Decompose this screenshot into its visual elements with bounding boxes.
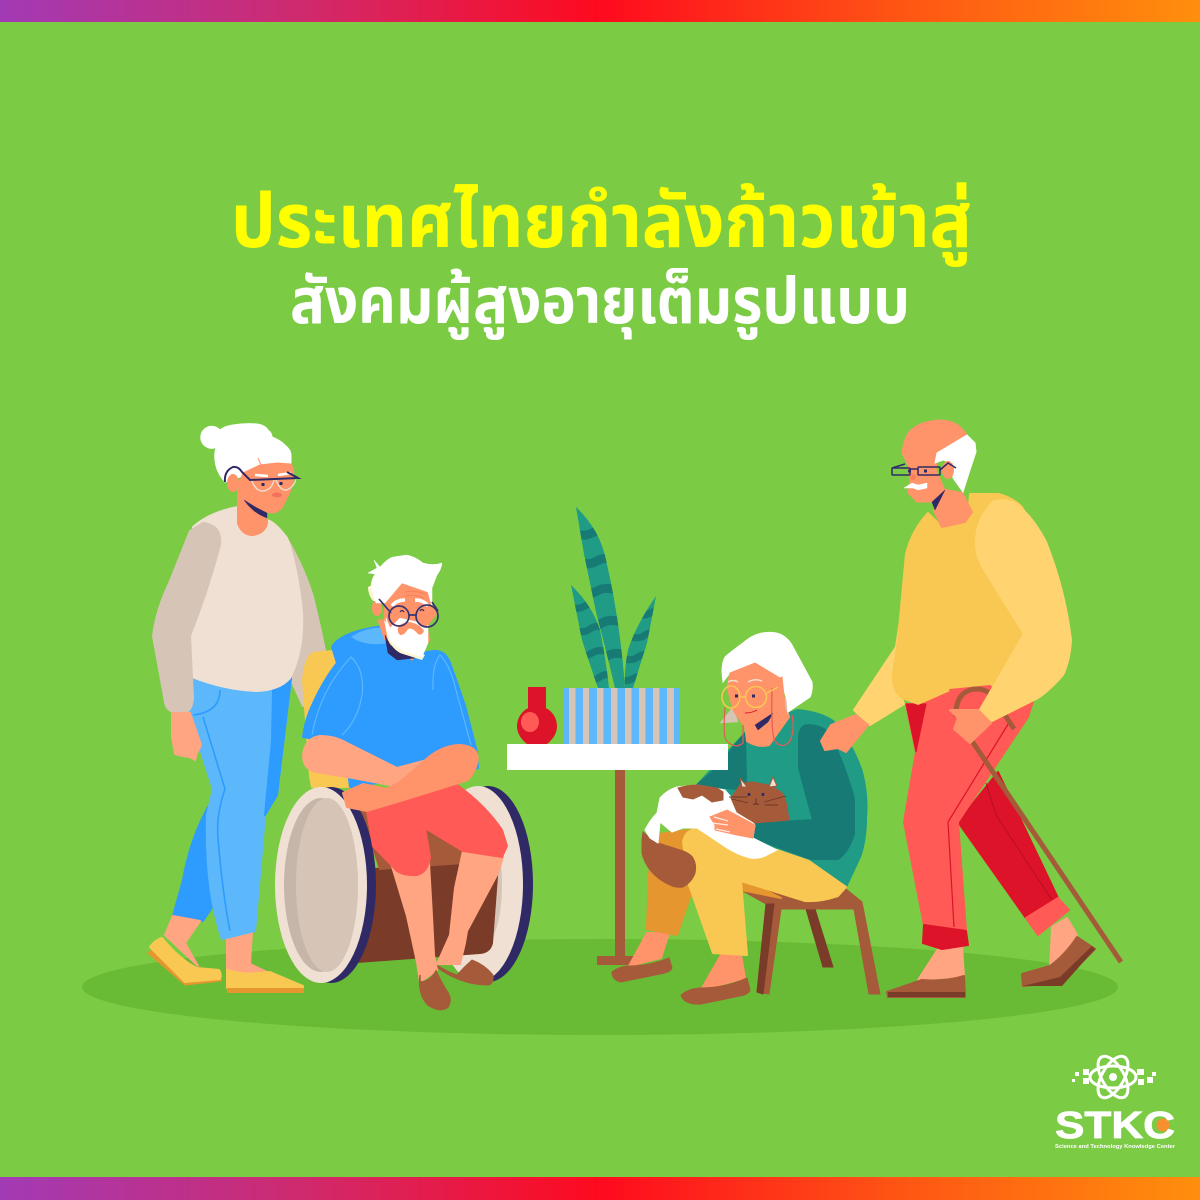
logo: STKC [1055,1052,1176,1150]
table top [507,744,728,770]
near wheel inner shade [284,798,358,972]
near arm [153,523,220,714]
orbit 1 [1090,1066,1136,1088]
bridge and arm [892,463,956,470]
beard [386,618,428,657]
neck shadow [244,500,267,518]
left lens [892,468,910,475]
under thigh [741,878,781,898]
stool front leg shade [757,904,774,994]
front calf [227,931,267,972]
neck [378,620,430,660]
smile [745,710,757,713]
neck [238,490,267,535]
moustache [904,483,927,490]
hood highlight [352,628,385,644]
figure: standing woman with bun [148,424,325,993]
fingers [712,817,730,832]
front shoe upper [227,970,303,988]
hair shade behind ear [783,698,789,715]
face [384,583,437,645]
back leg seam [986,783,1052,900]
far wheel rim [443,786,533,982]
stool back leg [806,909,833,967]
trousers [188,676,291,939]
near leg [391,863,437,982]
sleeve seams [312,655,471,745]
far arm [288,540,325,706]
figure: standing man with cane [821,420,1121,997]
ear [942,461,954,479]
pixel squares [1072,1069,1156,1085]
eyebrows [728,680,762,682]
right leaf [625,596,656,688]
back foot [629,933,669,966]
bottom gradient bar [0,1177,1200,1200]
upper arm [303,736,445,787]
neck shadow [755,713,773,730]
near wheel rim [286,787,376,983]
hair [368,555,442,607]
hand [172,713,201,760]
seat cushion [350,781,465,869]
near hand [950,710,991,743]
right lens [746,686,766,708]
eyes [400,610,424,612]
glasses [379,599,438,627]
trouser seam [203,717,230,931]
nucleus [1109,1073,1117,1081]
nose and moustache [398,622,424,635]
torso [893,494,1050,704]
striped pot [564,688,679,744]
table leg [615,770,625,957]
tagline: Science and Technology Knowledge Center [1055,1144,1176,1150]
hair cream edge [368,585,378,601]
mouth [272,492,282,498]
cat nose and mouth [753,798,759,804]
face [727,663,785,725]
cat whiskers [729,796,786,805]
beard shadow [385,635,415,660]
front shoe [681,978,750,1004]
hand on shoulder [821,715,868,752]
trouser pocket [193,690,220,715]
right leaf stripes [624,608,654,684]
hoodie [303,626,478,787]
table with vase and plant [517,507,679,965]
figure: seated woman with cat [612,632,880,1004]
vase highlight [521,712,539,732]
stool [741,885,880,994]
eyes [263,482,281,486]
hair parting [258,458,261,465]
near slipper [420,971,450,1010]
near arm [976,500,1071,721]
hand on cat [710,810,755,838]
eyebrows [392,600,428,606]
sleeve near table [697,733,746,789]
front foot [701,955,745,990]
title line 1: ประเทศไทยกำลังก้าวเข้าสู่ [231,179,972,267]
trouser shade [906,704,926,752]
title line 2: สังคมผู้สูงอายุเต็มรูปแบบ [290,265,910,340]
left leaf [571,585,609,688]
back shoe sole [148,950,221,985]
back calf [165,916,200,966]
back leg skin [1050,918,1077,970]
far wheel hub [468,824,502,944]
neck [934,490,972,527]
front cuff [923,925,968,949]
shorts [367,785,507,875]
ground shadow [82,939,1118,1035]
glasses [225,467,298,491]
hair shade [720,707,738,723]
trouser seam [948,721,1010,927]
ear [372,600,382,616]
neck [745,698,789,746]
cat body [642,777,789,887]
near wheel inner [296,798,358,972]
plant [571,507,656,688]
ear [227,474,239,492]
pot base [564,688,679,744]
torso front under arm [950,686,1000,712]
cat tail patch [642,832,696,887]
back shoe [1022,937,1095,986]
front leg skin [918,947,964,980]
trousers [904,686,1034,931]
cat back patch [678,785,723,802]
cat left ear [740,778,747,787]
back leg trousers [647,830,693,935]
vase neck [528,687,546,713]
eyebrows [255,473,291,476]
seat base [357,863,498,962]
front shoe sole [227,988,304,993]
title [231,179,972,340]
pot stripes [569,688,674,744]
glasses chain [724,688,793,746]
sweater [697,710,866,887]
lower arm [343,745,478,811]
glasses [892,463,956,475]
back leg [173,807,220,921]
left leaf stripes [574,602,608,683]
left lens [389,606,409,626]
cat eyes [749,793,763,796]
top gradient bar [0,0,1200,22]
hair [201,424,291,482]
neck shadow [932,490,945,510]
table foot [597,956,639,965]
hair [722,632,812,712]
orbit 2 [1092,1052,1134,1102]
beard cream edge [384,620,425,660]
back shoe sole [1023,946,1095,986]
sweater arm [753,725,854,859]
far leg [437,851,503,964]
frame [225,467,298,482]
far slipper [435,960,493,985]
chair back [303,651,350,787]
torso [190,507,302,691]
front shoe sole [888,992,965,997]
atom emblem [1090,1052,1136,1102]
back cuff [1026,898,1069,935]
back shoe [612,958,672,982]
arm [740,687,778,697]
front leg trousers [683,828,846,955]
orbit 3 [1092,1052,1134,1102]
face [902,420,967,502]
back shoe upper [150,938,221,982]
hair [935,435,976,492]
nose [910,474,916,480]
centre leaf stripes [580,528,622,660]
glasses [722,686,778,708]
cat right ear [769,777,777,787]
lenses [252,479,296,491]
trousers shaded side [265,678,291,815]
eyes [908,470,927,472]
back leg [958,772,1058,918]
cat head [731,782,789,823]
near wheel tyre [275,787,367,983]
front shoe [887,976,965,997]
logo dot [1156,1118,1170,1132]
cane [956,689,1121,962]
right lens [416,605,438,627]
right lens [918,467,940,475]
vase [517,687,557,744]
forehead crease [405,591,426,598]
centre leaf [576,507,625,688]
vase body [517,706,557,744]
face [238,463,294,513]
eyes [735,694,755,698]
far wheel tyre [433,786,523,982]
wordmark: STKC [1055,1105,1175,1147]
cat white fur [645,785,777,858]
far arm [854,523,926,725]
bridge and arm [379,599,438,615]
left lens [722,686,740,708]
figure: man in wheelchair [275,555,533,1010]
